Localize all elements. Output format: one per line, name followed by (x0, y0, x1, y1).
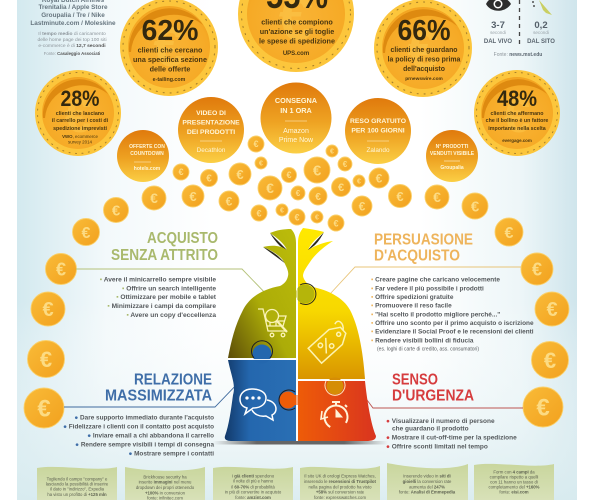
stat coin: 28%: VWO, ecommerce (62, 134, 98, 139)
puzzle knob: green (296, 284, 316, 304)
list: acquisto senza attrito (100, 276, 217, 319)
list: persuasione d'acquisto: ▪ Far vedere il più possibile i prodotti (371, 286, 484, 292)
heading: persuasione d'acquisto: PERSUASIONE (374, 232, 473, 248)
falling euro coins: € (315, 214, 319, 222)
stat: attention seconds live vs site (484, 0, 555, 58)
falling euro coins: € (357, 178, 361, 186)
text block: brands and loading time: e-commerce è di 12,7 secondi (38, 43, 106, 49)
circle: offerte con countdown (117, 130, 169, 182)
falling euro coins: € (236, 167, 244, 182)
bottom note 2: +100% in conversion (145, 490, 186, 496)
circle: consegna in 1 ora: Amazon (283, 128, 309, 135)
stat coin: 28%: 28% (60, 86, 100, 111)
stat coin: 62%: delle offerte (150, 64, 190, 74)
circle: offerte con countdown: COUNTDOWN (130, 151, 164, 157)
icon: chat bubbles (240, 389, 276, 420)
list: persuasione d'acquisto: ▪ Offrire spedizioni gratuite (371, 294, 454, 301)
text block: brands and loading time: Groupalia / Tre / Nike (41, 12, 105, 19)
circle: video di presentazione: Decathlon (197, 147, 226, 154)
stat: attention seconds live vs site: Fonte: news.mst.edu (494, 52, 542, 58)
connector: acquisto senza attrito (76, 269, 270, 298)
bottom note 5: fonte: Analisi di Emmepedia (399, 490, 456, 494)
heading: persuasione d'acquisto: D'ACQUISTO (374, 248, 460, 264)
bottom note 5: aumenta del 247% (409, 484, 445, 490)
icon: stopwatch (320, 401, 352, 433)
bottom note 3: I già clienti spendono (232, 474, 275, 478)
stat coin: 62%: una specifica sezione (133, 55, 207, 64)
stat coin: 48% (474, 70, 560, 156)
falling euro coins: € (206, 174, 212, 184)
stat: attention seconds live vs site: 0,2 (534, 20, 548, 31)
stat coin: 48%: € (504, 90, 530, 143)
bottom note 4: nella pagina del prodotto ha visto (308, 484, 372, 490)
circle: numero prodotti venduti (426, 130, 478, 182)
list: relazione massimizzata: ● Fidelizzare i clienti con il contatto post acquisto (63, 424, 214, 430)
bottom note 1: il dato in "indirizzo", Expedia (50, 486, 105, 492)
circle: video di presentazione: VIDEO DI (196, 110, 226, 117)
bottom note 4: inserendo le recensioni di Trustpilot (304, 479, 377, 484)
falling euro coins: € (256, 208, 262, 218)
stat coin: 66%: € (407, 18, 439, 81)
text block: brands and loading time: Fonte: Casaleggio Associati (44, 51, 100, 56)
connector: relazione massimizzata (64, 380, 241, 407)
heading: senso d'urgenza (392, 372, 474, 404)
falling euro coins: € (178, 167, 184, 177)
puzzle knob: blue (252, 341, 272, 364)
falling euro coins: € (296, 189, 301, 198)
stat coin: 28%: spedizione imprevisti (53, 126, 107, 132)
falling euro coins: € (333, 218, 339, 228)
divider lines (228, 228, 366, 441)
list: persuasione d'acquisto: ▪ "Hai scelto il prodotto migliore perché..." (371, 312, 500, 318)
falling euro coins: € (376, 172, 383, 186)
list: senso d'urgenza (386, 418, 517, 450)
connector: persuasione d'acquisto (330, 267, 521, 294)
circle: reso gratuito (345, 98, 411, 164)
stat coin: 28% (35, 70, 121, 156)
stat coin: 28%: il carrello per i costi di (52, 118, 109, 124)
list: acquisto senza attrito: ▪ Offrire un search intelligente (122, 286, 216, 292)
text block: brands and loading time (30, 0, 116, 56)
list: persuasione d'acquisto: ▪ Creare pagine che caricano velocemente (371, 276, 500, 284)
falling euro coins: € (359, 200, 366, 214)
stat coin: 48%: clienti che affermano (490, 111, 544, 117)
falling euro coins: € (82, 225, 91, 242)
circle: offerte con countdown: OFFERTE CON (129, 144, 165, 150)
falling euro coins: € (42, 299, 54, 321)
stat coin: 55% (238, 0, 354, 72)
list: persuasione d'acquisto: (es. loghi di carte di credito, ass. consumatori) (377, 346, 479, 352)
quadrant: yellow (298, 228, 365, 379)
bottom note 4: Il sito UK di orologi Express Watches, (304, 474, 376, 478)
text block: brands and loading time: Lastminute.com / Moleskine (30, 20, 116, 27)
falling euro coins: € (56, 260, 66, 280)
falling euro coins: € (259, 160, 263, 168)
text block: brands and loading time: delle home page dei top 100 siti (37, 37, 107, 43)
puzzle knob: yellow (325, 378, 345, 395)
falling euro coins: € (315, 192, 321, 203)
list: persuasione d'acquisto: ▪ Offrire uno sconto per il primo acquisto o iscrizione (371, 320, 534, 327)
icon: cursor (532, 0, 552, 15)
falling euro coins: € (280, 208, 284, 214)
list: acquisto senza attrito: ▪ Avere il minicarrello sempre visibile (100, 276, 216, 284)
stat coin: 62%: e-tailing.com (153, 77, 186, 83)
stat coin: 28%: clienti che lasciano (56, 111, 105, 117)
falling euro coins: € (189, 189, 197, 204)
falling euro coins: € (505, 225, 514, 242)
quadrant: blue (225, 360, 296, 441)
stat coin: 62%: clienti che cercano (138, 46, 203, 54)
circle: numero prodotti venduti: Groupalia (440, 165, 464, 171)
list: relazione massimizzata: ● Rendere sempre visibili i tempi di consegna (75, 442, 214, 448)
bottom note 1 (37, 467, 117, 500)
falling euro coins: € (313, 162, 322, 180)
bottom note 1: ha visto un profitto di +125 mln (47, 492, 107, 497)
bottom note 4: +58% sul conversion rate (316, 490, 365, 494)
heading: senso d'urgenza: D'URGENZA (392, 388, 474, 404)
bottom note 6 (474, 464, 554, 500)
icon: shopping cart (258, 309, 287, 337)
quadrant: green (228, 229, 296, 358)
heading: senso d'urgenza: SENSO (392, 372, 438, 388)
stat: attention seconds live vs site: DAL VIVO (484, 39, 512, 45)
falling euro coins: € (338, 182, 344, 194)
bottom note 1: lasciando la possibilità di inserire (46, 482, 109, 486)
heading: acquisto senza attrito (111, 230, 218, 264)
list: acquisto senza attrito: ▪ Ottimizzare per mobile e tablet (116, 294, 217, 301)
bottom note 6: compilare rispetto a quelli (490, 474, 538, 480)
quadrant: orange (298, 381, 376, 441)
circle: consegna in 1 ora: CONSEGNA (275, 96, 318, 105)
list: acquisto senza attrito: ▪ Minimizzare i campi da compilare (107, 303, 216, 310)
falling euro coins: € (226, 194, 233, 208)
heading: acquisto senza attrito: SENZA ATTRITO (111, 247, 218, 264)
bottom note 3: il volte di più e hanno (233, 478, 274, 484)
bottom note 6: con 11 hanno un tasso di (490, 480, 538, 484)
stat: attention seconds live vs site: 3-7 (491, 20, 505, 31)
falling euro coins: € (532, 260, 542, 280)
heading: relazione massimizzata (105, 372, 212, 404)
falling euro coins: € (330, 148, 334, 156)
text block: brands and loading time: Trenitalia / Apple Store (38, 4, 108, 11)
stat coin: 66%: clienti che guardano (390, 47, 458, 54)
bottom note 5: gioielli la conversion rate (403, 479, 452, 484)
falling euro coins: € (266, 180, 274, 196)
heading: persuasione d'acquisto (374, 232, 473, 264)
circle: reso gratuito: Zalando (366, 147, 390, 154)
text block: brands and loading time: Il tempo medio di caricamento (38, 31, 106, 37)
stat coin: 66%: 66% (398, 15, 450, 47)
bottom note 3: il 60-70% di probabilità (231, 484, 275, 490)
bottom note 2: dropdown dei propri ottenendo (136, 485, 195, 490)
falling euro coins: € (536, 394, 550, 422)
circle: consegna in 1 ora: IN 1 ORA (280, 106, 313, 115)
circle: numero prodotti venduti: VENDUTI VISIBILE (430, 151, 475, 157)
falling euro coins: € (40, 347, 52, 372)
stat coin: 48%: 48% (497, 86, 537, 111)
stat coin: 28%: survey 2014 (68, 140, 93, 144)
list: relazione massimizzata: ● Inviare email a chi abbandona il carrello (87, 432, 214, 440)
bottom note 4 (300, 466, 380, 500)
list: senso d'urgenza: ● Visualizzare il numero di persone (386, 418, 495, 425)
connector: senso d'urgenza (364, 396, 523, 408)
stat: attention seconds live vs site: DAL SITO (527, 39, 555, 45)
stat coin: 66%: dell'acquisto (403, 66, 445, 73)
bottom note 3 (213, 467, 293, 500)
list: persuasione d'acquisto: ▪ Evidenziare il Social Proof e le recensioni dei clienti (371, 328, 534, 336)
list: relazione massimizzata: ● Dare supporto immediato durante l'acquisto (74, 414, 214, 422)
bottom note 3: fonte: amzint.com (235, 495, 271, 500)
falling euro coins: € (294, 212, 300, 222)
bottom note 5 (387, 463, 468, 500)
stat coin: 66%: prnewswire.com (405, 76, 443, 82)
list: persuasione d'acquisto (371, 276, 534, 352)
falling euro coins: € (396, 189, 404, 204)
circle: numero prodotti venduti: N° PRODOTTI (436, 144, 469, 150)
list: relazione massimizzata (63, 414, 214, 458)
falling euro coins: € (544, 348, 556, 373)
heading: relazione massimizzata: RELAZIONE (134, 372, 212, 388)
bottom note 2: inserito immagini nel menu (139, 480, 192, 484)
stat coin: 55%: un'azione se gli toglie (260, 27, 334, 36)
stat coin: 28%: € (65, 90, 91, 143)
ear shadows (263, 232, 324, 264)
bottom note 2: Brickhouse security ha (143, 474, 187, 480)
stat coin: 55%: UPS.com (283, 51, 309, 57)
circle: consegna in 1 ora (260, 82, 332, 154)
falling euro coins: € (253, 139, 259, 149)
circle: video di presentazione: DEI PRODOTTI (187, 129, 235, 136)
bottom note 4: fonte: expresswatches.com (314, 495, 366, 500)
stat coin: 62%: € (153, 15, 185, 78)
stat coin: 48%: evergage.com (502, 138, 532, 143)
stat coin: 62% (120, 0, 218, 96)
bottom note 1: Togliendo il campo "company" e (47, 476, 108, 482)
circle: consegna in 1 ora: Prime Now (279, 137, 314, 144)
bottom note 6: fonte: eisi.com (499, 490, 529, 494)
list: senso d'urgenza: ● Mostrare il cut-off-time per la spedizione (386, 434, 517, 442)
stat coin: 48%: importante nella scelta (488, 126, 546, 132)
stat coin: 55%: clienti che compiono (261, 18, 333, 26)
puzzle money bag (213, 228, 388, 444)
heading: acquisto senza attrito: ACQUISTO (147, 230, 218, 247)
bottom note 3: in più di convertire in acquisto (225, 490, 282, 494)
heading: relazione massimizzata: MASSIMIZZATA (105, 388, 212, 404)
stat coin: 62%: 62% (142, 15, 198, 47)
list: senso d'urgenza: che guardano il prodotto (392, 426, 469, 432)
stat coin: 66%: la policy di reso prima (388, 56, 461, 64)
list: persuasione d'acquisto: ▪ Rendere visibili bollini di fiducia (371, 338, 474, 344)
list: persuasione d'acquisto: ▪ Promuovere il reso facile (371, 302, 452, 310)
stat coin: 55%: le spese di spedizione (259, 36, 335, 46)
falling euro coins: € (433, 189, 441, 205)
circle: offerte con countdown: hotels.com (134, 166, 161, 172)
falling euro coins: € (286, 170, 292, 180)
icon: eye (486, 0, 511, 11)
falling euro coins (24, 136, 569, 428)
bottom note 2 (125, 467, 205, 500)
falling euro coins: € (343, 160, 348, 169)
bottom note 6: Form con 4 campi da (493, 470, 535, 474)
stat coin: 48%: che il bollino è un fattore (486, 118, 548, 124)
falling euro coins: € (112, 202, 121, 220)
puzzle knob: orange (279, 390, 298, 410)
icon: discount tag (308, 320, 353, 363)
bag shadow (213, 441, 388, 444)
falling euro coins: € (471, 198, 480, 216)
stat coin: 66% (374, 0, 472, 97)
falling euro coins: € (150, 190, 158, 206)
list: acquisto senza attrito: ▪ Avere un copy d'eccellenza (126, 312, 216, 319)
bottom note 6: completamento del +160% (488, 484, 540, 490)
falling euro coins: € (546, 299, 558, 321)
circle: reso gratuito: RESO GRATUITO (350, 118, 406, 125)
circle: reso gratuito: PER 100 GIORNI (351, 128, 405, 134)
list: senso d'urgenza: ● Offrire sconti limitati nel tempo (386, 444, 488, 450)
circle: video di presentazione (178, 97, 244, 163)
stat: attention seconds live vs site: secondi (490, 30, 506, 35)
falling euro coins: € (37, 396, 51, 422)
circle: video di presentazione: PRESENTAZIONE (182, 120, 240, 126)
stat: attention seconds live vs site: secondi (533, 30, 549, 35)
list: relazione massimizzata: ● Mostrare sempre i contatti (128, 450, 214, 458)
bottom note 5: Inserendo video in siti di (403, 474, 451, 478)
